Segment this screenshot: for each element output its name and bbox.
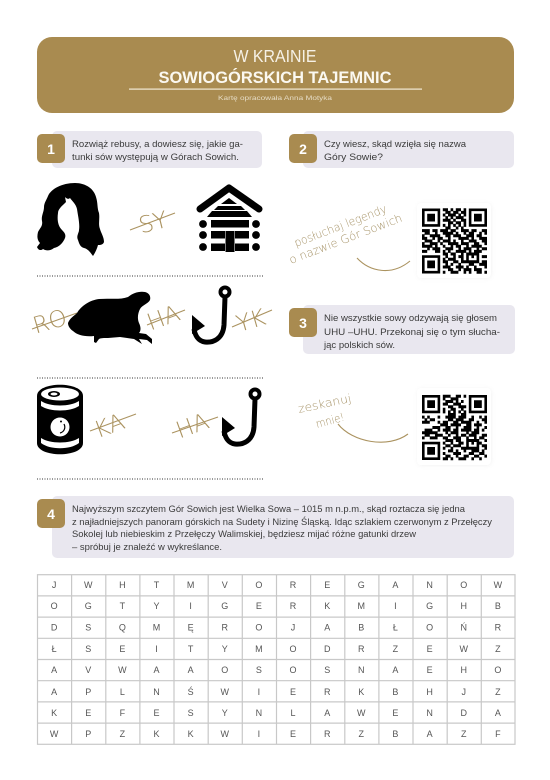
badge 3	[289, 308, 317, 337]
task 3 text: Nie wszystkie sowy odzywają się głosem	[324, 313, 497, 324]
handwritten note: scan me: zeskanuj	[297, 391, 352, 416]
rebus letters YK: YK	[233, 305, 269, 338]
QR code 2	[422, 395, 487, 460]
task 3 text: jąc polskich sów.	[323, 340, 395, 351]
rebus letters RO: RO	[30, 305, 70, 339]
QR code 1 card	[417, 203, 491, 278]
icon: tin can	[37, 385, 83, 454]
handwritten note: legend: o nazwie Gór Sowich	[287, 211, 404, 267]
arrow: curve to QR code	[357, 258, 410, 271]
rebus letters SY: SY	[136, 207, 170, 239]
rebus letters HA: HA	[144, 301, 184, 336]
task 1 panel	[37, 131, 262, 168]
task 4 text	[72, 504, 492, 553]
task 3 panel	[289, 305, 515, 354]
icon: hair	[37, 183, 104, 256]
task 2 text	[324, 139, 467, 163]
word search grid: WPZKKWIERZBAZF	[50, 729, 501, 739]
icon: frog	[68, 292, 152, 344]
word search grid: OGTYIGERKMIGHB	[51, 601, 501, 611]
word search grid: KEFESYNLAWENDA	[51, 708, 501, 718]
handwritten note: legend: posłuchaj legendy	[292, 202, 389, 250]
task 3 text	[323, 313, 500, 351]
task 4 text: Najwyższym szczytem Gór Sowich jest Wielka Sowa – 1015 m n.p.m., skąd roztacza się jedna	[72, 504, 466, 515]
rebus letters KA: KA	[91, 409, 128, 444]
word search grid: AVWAAOSOSNAEHO	[51, 665, 501, 675]
task 4 text: Sokolej lub niebieskim z Przełęczy Walimskiej, będziesz mijać różne gatunki drzew	[72, 529, 416, 540]
badge 1	[37, 134, 65, 163]
task 1 text: Rozwiąż rebusy, a dowiesz się, jakie ga-	[72, 139, 243, 150]
task 1 text: tunki sów występują w Górach Sowich.	[72, 152, 239, 163]
handwritten note: scan me	[297, 391, 352, 431]
badge 1: 1	[47, 141, 55, 157]
badge 2: 2	[299, 141, 307, 157]
task 1 text	[72, 139, 243, 163]
header banner	[37, 37, 514, 113]
rebus letters HA: HA	[173, 409, 213, 444]
title line 2: SOWIOGÓRSKICH TAJEMNIC	[158, 68, 392, 87]
arrow: curve to QR code	[338, 424, 408, 442]
icon: fish hook	[222, 390, 260, 444]
task 4 text: – spróbuj je znaleźć w wykreślance.	[72, 542, 222, 553]
title line 1: W KRAINIE	[234, 46, 316, 66]
word search grid: DSQMĘROJABŁOŃR	[51, 623, 502, 633]
icon: fish hook	[192, 288, 230, 342]
task 4 panel	[37, 496, 514, 558]
icon: log cabin	[199, 188, 260, 252]
badge 4: 4	[47, 506, 55, 522]
task 3 text: UHU –UHU. Przekonaj się o tym słucha-	[324, 327, 500, 338]
word search grid	[38, 575, 515, 744]
task 4 text: z najładniejszych panoram górskich na Sudety i Nizinę Śląską. Idąc szlakiem czerwonym z Przełęczy	[72, 516, 492, 528]
badge 2	[289, 134, 317, 163]
QR code 2 card	[417, 388, 491, 465]
author credit: Kartę opracowała Anna Motyka	[218, 95, 332, 102]
word search grid: JWHTMVOREGANOW	[52, 580, 503, 590]
word search grid: APLNŚWIERKBHJZ	[51, 686, 501, 697]
badge 4	[37, 499, 65, 528]
word search grid: ŁSEITYMODRZEWZ	[52, 644, 501, 654]
QR code 1	[422, 208, 487, 274]
badge 3: 3	[299, 315, 307, 331]
task 2 text: Góry Sowie?	[324, 152, 383, 163]
handwritten note: scan me: mnie!	[314, 410, 346, 431]
task 2 text: Czy wiesz, skąd wzięła się nazwa	[324, 139, 467, 150]
task 2 panel	[289, 131, 514, 168]
